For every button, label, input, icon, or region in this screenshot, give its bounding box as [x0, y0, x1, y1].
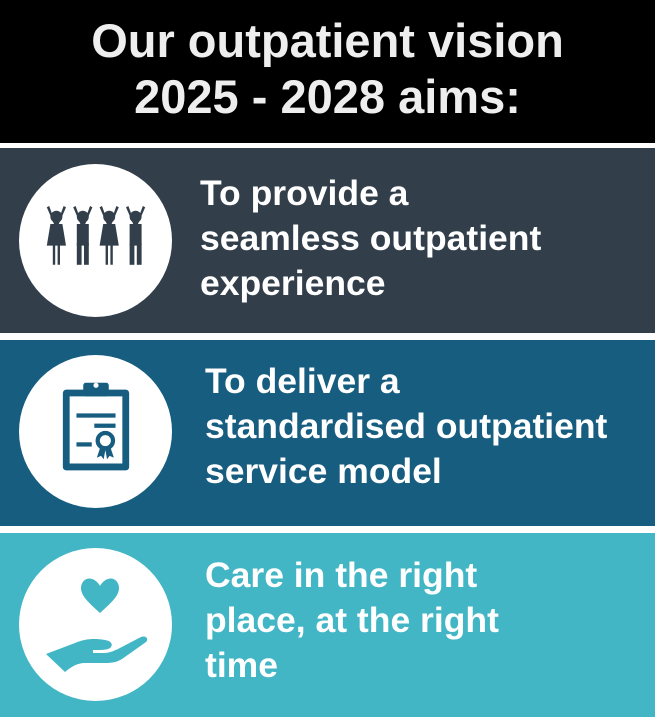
- text: standardised: To deliver a: [205, 361, 400, 401]
- panel: seamless experience: [0, 148, 655, 333]
- text: standardised: [205, 361, 607, 491]
- text: seamless: [200, 173, 541, 303]
- text: standardised: service model: [205, 451, 442, 491]
- panel: right place right time: [0, 533, 655, 717]
- text: right place: time: [205, 645, 278, 685]
- text: standardised: standardised outpatient: [205, 406, 607, 446]
- title: Our outpatient vision: [91, 14, 564, 67]
- text: right place: Care in the right: [205, 555, 477, 595]
- icon: people group: [19, 164, 172, 317]
- text: seamless: seamless outpatient: [200, 218, 541, 258]
- panel: standardised model: [0, 340, 655, 526]
- title: [91, 14, 564, 123]
- icon: clipboard certificate: [19, 355, 172, 508]
- title: 2025 - 2028 aims:: [134, 70, 521, 123]
- text: right place: place, at the right: [205, 600, 499, 640]
- header: [0, 0, 655, 143]
- text: seamless: To provide a: [200, 173, 408, 213]
- text: seamless: experience: [200, 263, 386, 303]
- icon: hand with heart: [19, 548, 172, 701]
- text: right place: [205, 555, 499, 685]
